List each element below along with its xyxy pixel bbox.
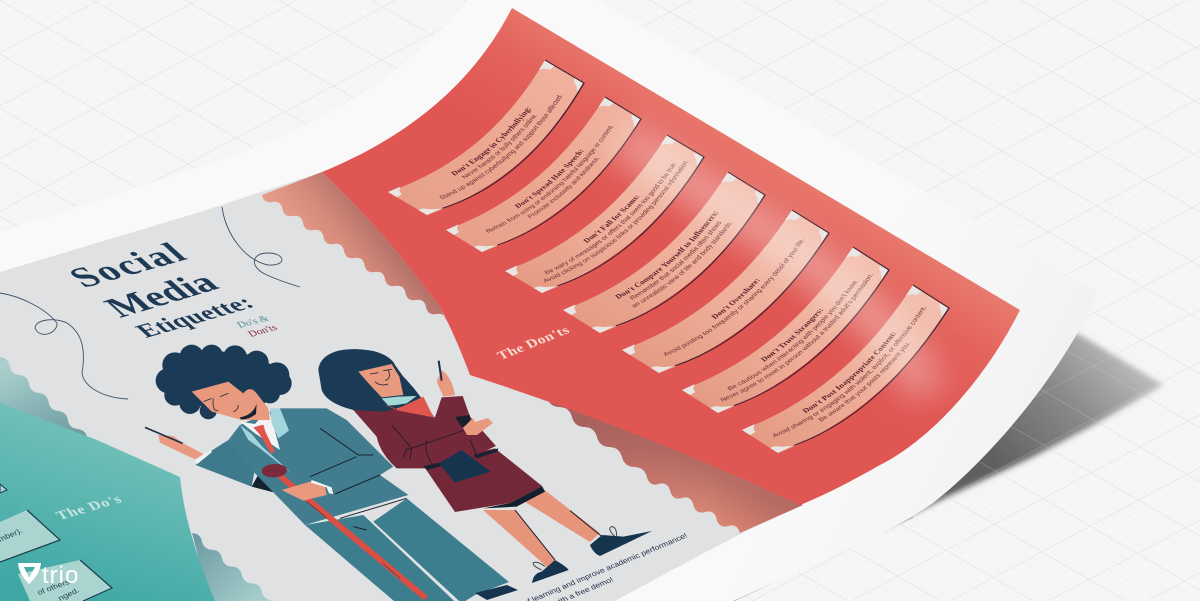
card: don't spread hate speech: Don't Spread Hate Speech:: [514, 150, 584, 208]
card: don't overshare: Don't Overshare:: [711, 279, 760, 320]
heading: Social Media Etiquette: Media: [96, 266, 227, 324]
card: don't fall for scams: Avoid clicking on suspicious links or providing personal information.: [544, 161, 688, 283]
card: don't spread hate speech: [446, 96, 642, 252]
card: don't engage in cyberbullying: [388, 60, 585, 215]
subheading: Do's and Don'ts: Do's &: [235, 314, 271, 330]
woman jacket: [353, 396, 496, 468]
card: don't spread hate speech: Promote inclusivity and kindness.: [528, 158, 600, 218]
card: don't trust strangers: Don't Trust Strangers:: [760, 308, 823, 362]
card: don't post inappropriate content: Be aware that your posts represent you.: [818, 343, 910, 422]
card: don't engage in cyberbullying: Never harass or bully others online.: [462, 114, 538, 179]
panel: red don'ts: [322, 8, 1020, 505]
decorative scallop: lower peach: [547, 397, 803, 533]
card: do's partial bottom: [18, 560, 112, 601]
man phone hand: [158, 435, 203, 459]
man beard: [240, 403, 257, 419]
woman face lines: [370, 369, 392, 385]
man shoe: [475, 585, 518, 600]
man left sleeve: [196, 440, 255, 487]
man pants left leg: [305, 515, 457, 601]
decorative scallop: lower teal: [192, 533, 273, 601]
woman face: [358, 364, 403, 397]
man hand: [282, 482, 327, 501]
card: don't engage in cyberbullying: Don't Engage in Cyberbullying:: [450, 108, 531, 176]
card: don't fall for scams: Be wary of messages or offers that seem too good to be true.: [544, 163, 677, 274]
woman scarf: [382, 397, 435, 418]
card: don't trust strangers: Never agree to meet in person without a trusted adult's permission.: [720, 274, 873, 402]
card: don't post inappropriate content: [742, 284, 950, 453]
logo shield icon: [18, 563, 41, 584]
card: don't trust strangers: [682, 246, 890, 413]
woman legs: [483, 488, 602, 567]
decorative swirl left: [0, 293, 128, 399]
woman skirt: [423, 448, 542, 512]
woman bag: [439, 450, 491, 483]
card: do's partial top: [0, 484, 7, 493]
man jacket seams: [310, 428, 407, 530]
card: don't post inappropriate content: Don't Post Inappropriate Content:: [802, 332, 896, 414]
decorative scallop: upper teal: [0, 357, 97, 447]
card: don't post inappropriate content: Avoid sharing or engaging with violent, explicit, or offensive content.: [774, 307, 926, 438]
subheading: Do's and Don'ts: [235, 314, 280, 339]
woman hair: [318, 349, 422, 412]
card: don't engage in cyberbullying: Stand up against cyberbullying and support those affected.: [440, 95, 563, 200]
card: don't compare yourself to influencers: Remember that social media often shows: [630, 221, 722, 300]
man jacket: [228, 408, 408, 525]
card: don't fall for scams: [505, 134, 705, 293]
glossy light band on curl: [620, 135, 925, 395]
illustration: man: [145, 345, 518, 601]
panel: teal do's: [0, 403, 215, 601]
woman wrist shadow: [455, 415, 470, 427]
woman jacket seams: [392, 417, 477, 467]
heading: The Don'ts: The Don'ts: [494, 323, 573, 363]
man left cuff: [195, 450, 212, 464]
man back arm gap: [252, 472, 280, 494]
man face lines: [203, 393, 238, 412]
panel: grey centre background: [0, 172, 800, 601]
paper drop shadow: [733, 333, 1163, 601]
microphone cane: [282, 477, 424, 597]
man lapels: [240, 408, 292, 473]
man shirt: [240, 408, 280, 450]
card: don't spread hate speech: Refrain from using or endorsing hateful language or content.: [486, 126, 614, 233]
cane dark segment: [307, 502, 400, 578]
man pants right leg: [373, 498, 509, 601]
card: don't overshare: [622, 210, 830, 373]
card: don't compare yourself to influencers: Don't Compare Yourself to Influencers:: [614, 212, 718, 300]
woman under skirt shadow: [483, 486, 545, 508]
logo: trio: [18, 562, 79, 589]
card: do's partial bottom: of others.: [36, 577, 73, 597]
card: don't compare yourself to influencers: [563, 172, 766, 333]
decorative scallop: upper peach: [262, 172, 446, 321]
card: do's partial middle: [0, 510, 60, 562]
woman phone hand: [437, 361, 455, 397]
woman jacket hem shadow: [423, 448, 498, 470]
man face: [192, 382, 270, 420]
logo wordmark: trio: [42, 562, 79, 589]
man phone: [145, 427, 183, 443]
man tie: [253, 425, 275, 453]
woman shoes: [532, 527, 652, 583]
heading: Social Media Etiquette: Etiquette:: [129, 291, 260, 342]
microphone head: [261, 463, 287, 478]
heading: Social Media Etiquette: [60, 236, 260, 342]
card: don't trust strangers: Be cautious when interacting with people you don't know.: [728, 280, 858, 390]
heading: The Do's: The Do's: [53, 492, 126, 523]
illustration: woman: [318, 349, 652, 583]
card: don't fall for scams: Don't Fall for Scams:: [583, 196, 640, 244]
man hair: [156, 345, 292, 419]
heading: Social Media Etiquette: Social: [60, 236, 197, 294]
decorative swirl right: [222, 207, 300, 287]
subheading: Do's and Don'ts: Don'ts: [246, 323, 280, 339]
man right cuff: [311, 480, 333, 494]
card: don't overshare: Avoid posting too frequently or sharing every detail of your life.: [664, 240, 805, 356]
woman collar: [382, 396, 417, 406]
card: don't compare yourself to influencers: an unrealistic view of life and body standards.: [632, 222, 732, 308]
woman hand: [463, 418, 493, 435]
